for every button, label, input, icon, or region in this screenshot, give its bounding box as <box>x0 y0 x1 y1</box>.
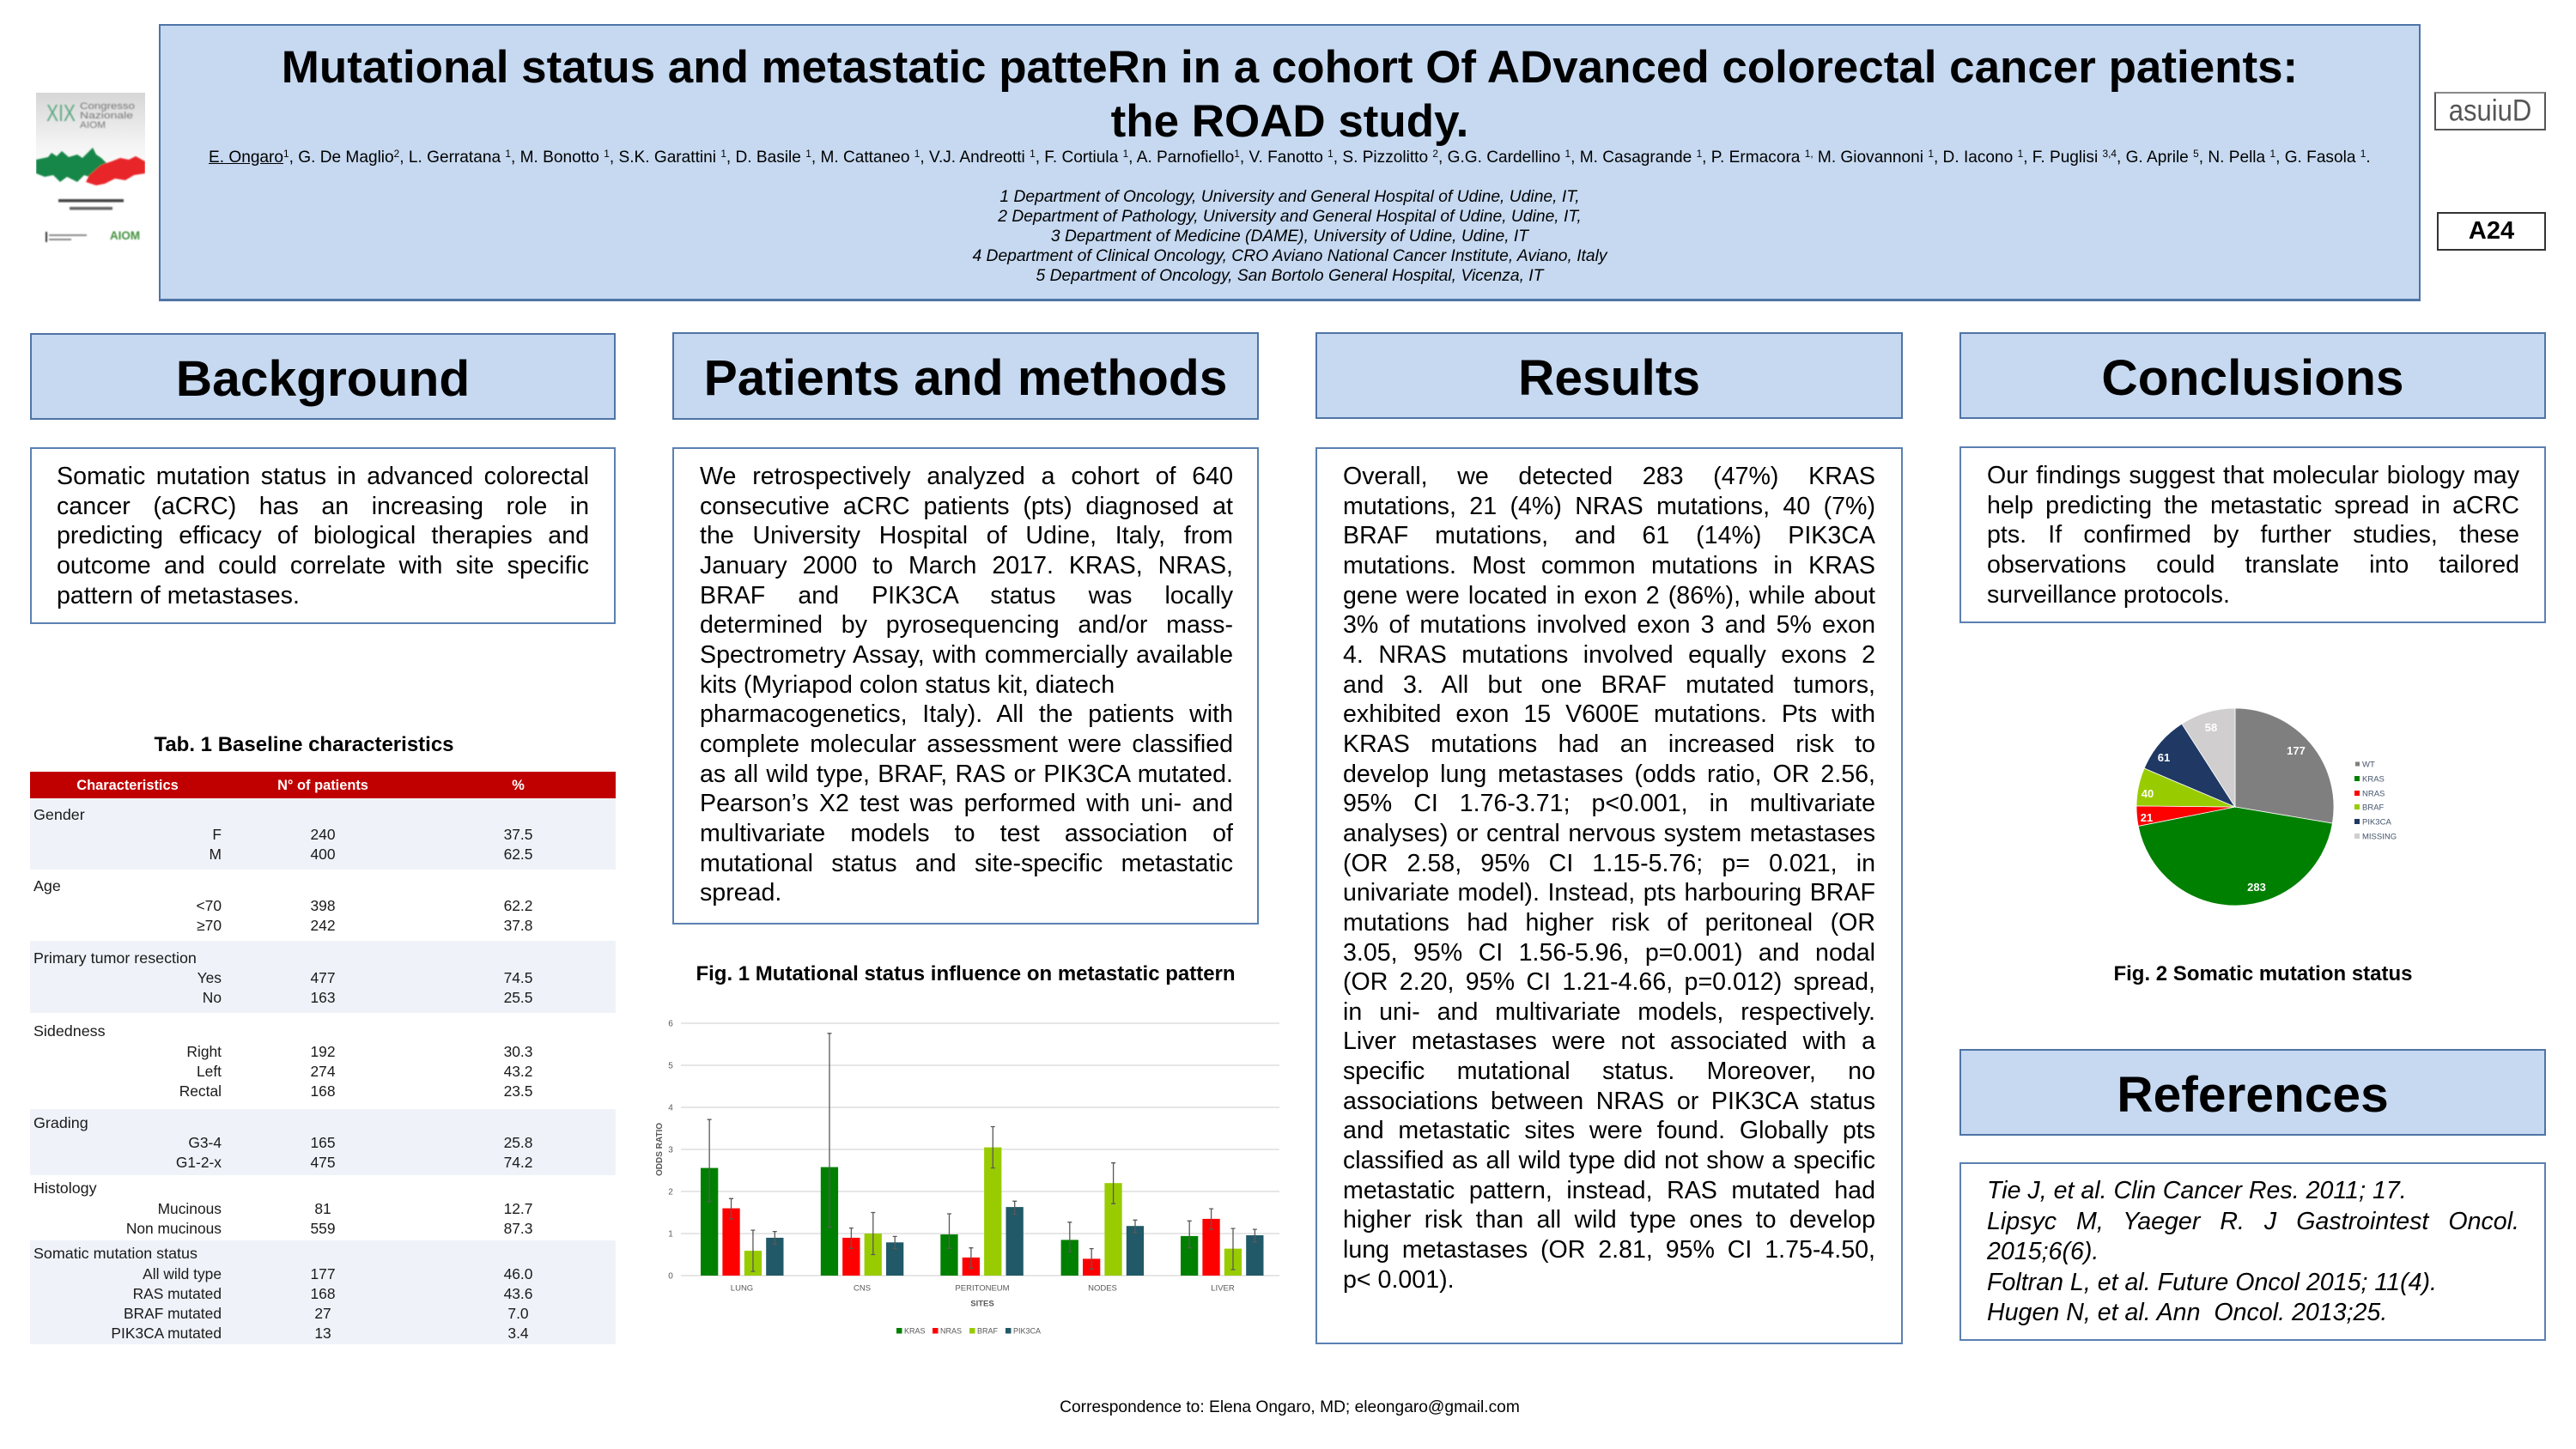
logo: XIX Congresso Nazionale AIOM: XIX <box>46 100 76 126</box>
text: background: outcome and could correlate with site specific <box>57 552 589 579</box>
table rows: sidedness: 43.2 <box>504 1063 532 1080</box>
table rows: gender: 400 <box>310 845 335 862</box>
table rows: age: 398 <box>310 896 335 913</box>
text: results: develop lung metastases (odds ratio, OR 2.56, <box>1343 761 1875 788</box>
y axis title: ODDS RATIO <box>655 1123 665 1176</box>
y axis ticks: 0 <box>668 1272 673 1281</box>
text: results: BRAF mutations, and 61 (14%) PIK3CA <box>1343 522 1875 549</box>
table rows: primary tumor resection: 163 <box>310 989 335 1006</box>
y axis ticks: 3 <box>668 1145 673 1155</box>
slice values: 177 <box>2287 744 2306 757</box>
legend: NRAS <box>2362 790 2385 798</box>
bars: peritoneum <box>940 1126 1024 1276</box>
badge: session type <box>2434 92 2546 130</box>
text: patients and methods <box>700 463 1233 906</box>
text: background: cancer (aCRC) has an increasing role in <box>57 493 589 520</box>
x axis labels: PERITONEUM <box>955 1284 1010 1293</box>
table header: N° of patients <box>277 778 368 793</box>
text: patients and methods: consecutive aCRC patients (pts) diagnosed at <box>700 493 1233 520</box>
text: patients and methods: mutational status and site-specific metastatic <box>700 850 1233 877</box>
table rows: somatic mutation status: 27 <box>314 1305 331 1322</box>
pie chart: somatic mutation status <box>2136 709 2397 906</box>
text: conclusions: help predicting the metastatic spread in aCRC <box>1987 492 2519 519</box>
text: results: univariate model). Instead, pts harbouring BRAF <box>1343 879 1875 906</box>
text: patients and methods: January 2000 to March 2017. KRAS, NRAS, <box>700 552 1233 579</box>
bars: nodes <box>1061 1163 1144 1276</box>
heading: Background <box>30 333 616 420</box>
table rows: somatic mutation status: PIK3CA mutated <box>111 1324 222 1341</box>
logo: XIX Congresso Nazionale AIOM: Nazionale <box>80 111 133 121</box>
table rows: grading: G1-2-x <box>176 1154 222 1171</box>
text: conclusions: Our findings suggest that molecular biology may <box>1987 462 2519 489</box>
table rows: gender: 240 <box>310 826 335 843</box>
table rows: sidedness: 168 <box>310 1082 335 1099</box>
table rows: somatic mutation status: BRAF mutated <box>124 1305 222 1322</box>
legend: PIK3CA <box>1013 1327 1041 1336</box>
legend: NRAS <box>940 1327 962 1336</box>
table rows: histology: Non mucinous <box>126 1219 222 1236</box>
affiliations: 4 Department of Clinical Oncology, CRO Aviano National Cancer Institute, Aviano, Italy <box>972 247 1607 265</box>
panel: background text <box>30 447 616 624</box>
text: results: exhibited exon 15 V600E mutations. Pts with <box>1343 700 1875 728</box>
table rows: age: Age <box>33 877 61 894</box>
badge: session type: asuiuD <box>2449 93 2531 128</box>
legend <box>896 1327 1041 1336</box>
table rows: sidedness: Sidedness <box>33 1022 106 1039</box>
text: results: and metastatic sites were found. Globally pts <box>1343 1117 1875 1144</box>
text: patients and methods: multivariate models to test association of <box>700 820 1233 847</box>
text: results: mutations had higher risk of peritoneal (OR <box>1343 909 1875 937</box>
text: results: specific mutational status. Moreover, no <box>1343 1058 1875 1085</box>
table rows: primary tumor resection: No <box>203 989 222 1006</box>
text: results: 3.05, 95% CI 1.56-5.96, p=0.001) and nodal <box>1343 939 1875 967</box>
slice values <box>2141 721 2306 894</box>
y axis ticks: 5 <box>668 1061 673 1071</box>
heading: Patients and methods: Patients and methods <box>704 350 1227 406</box>
logo: XIX Congresso Nazionale AIOM <box>36 93 145 243</box>
table rows: age <box>33 877 532 934</box>
legend: KRAS <box>904 1327 926 1336</box>
text: patients and methods: spread. <box>700 879 781 906</box>
bars: liver <box>1181 1209 1264 1276</box>
panel: title banner <box>159 24 2421 301</box>
text: patients and methods: pharmacogenetics, Italy). All the patients with <box>700 700 1233 728</box>
text: results: gene were located in exon 2 (86%), while about <box>1343 582 1875 609</box>
text: results: higher risk than all wild type ones to develop <box>1343 1206 1875 1234</box>
table rows: somatic mutation status: 3.4 <box>507 1324 529 1341</box>
table rows: primary tumor resection: 25.5 <box>504 989 532 1006</box>
slice values: 61 <box>2158 751 2170 764</box>
legend: PIK3CA <box>2362 817 2391 828</box>
figure 1 caption: Fig. 1 Mutational status influence on metastatic pattern <box>696 962 1236 985</box>
figure 2 caption: Fig. 2 Somatic mutation status <box>2113 962 2413 985</box>
text: results: metastatic pattern, instead, RAS mutated had <box>1343 1177 1875 1204</box>
text: results: analyses) or central nervous system metastases <box>1343 820 1875 847</box>
legend: MISSING <box>2362 833 2397 841</box>
heading: Conclusions: Conclusions <box>2101 350 2404 406</box>
table rows: age: 242 <box>310 917 335 934</box>
text: references: Hugen N, et al. Ann Oncol. 2013;25. <box>1987 1299 2387 1326</box>
table rows: somatic mutation status: All wild type <box>143 1265 222 1282</box>
table rows: grading: 25.8 <box>504 1133 532 1150</box>
table rows: somatic mutation status: 13 <box>314 1324 331 1341</box>
table header <box>30 772 616 798</box>
table rows: primary tumor resection: Yes <box>197 968 222 985</box>
heading: References <box>1959 1049 2546 1136</box>
table rows: primary tumor resection: Primary tumor resection <box>33 949 197 967</box>
table rows: gender: F <box>212 826 222 843</box>
slice: KRAS <box>2138 807 2332 906</box>
x axis labels: LUNG <box>731 1284 753 1293</box>
affiliations <box>972 188 1607 285</box>
text: patients and methods: determined by pyrosequencing and/or mass- <box>700 611 1233 639</box>
affiliations: 1 Department of Oncology, University and General Hospital of Udine, Udine, IT, <box>999 188 1580 206</box>
panel: patients and methods text <box>672 447 1259 925</box>
table rows: somatic mutation status <box>30 1240 616 1344</box>
text: results: p< 0.001). <box>1343 1266 1455 1294</box>
table rows: sidedness: Rectal <box>179 1082 222 1099</box>
table rows: somatic mutation status: 177 <box>310 1265 335 1282</box>
table rows: sidedness: 23.5 <box>504 1082 532 1099</box>
table rows: sidedness: Right <box>186 1042 222 1059</box>
table rows: grading: 165 <box>310 1133 335 1150</box>
text: conclusions: pts. If confirmed by further studies, these <box>1987 521 2519 549</box>
table rows: histology: 559 <box>310 1219 335 1236</box>
bars: CNS <box>821 1034 903 1276</box>
table rows: sidedness: Left <box>197 1063 222 1080</box>
table rows: grading: G3-4 <box>188 1133 222 1150</box>
heading: Background: Background <box>176 351 470 407</box>
text: results: KRAS mutations had an increased risk to <box>1343 731 1875 758</box>
text: results: (OR 2.20, 95% CI 1.21-4.66, p=0.012) spread, <box>1343 968 1875 996</box>
table header: Characteristics <box>76 778 179 793</box>
x axis labels: CNS <box>854 1284 871 1293</box>
legend: WT <box>2362 761 2375 769</box>
table rows: sidedness: 192 <box>310 1042 335 1059</box>
text: results: associations between NRAS or PIK3CA status <box>1343 1088 1875 1115</box>
text: patients and methods: Spectrometry Assay, with commercially available <box>700 641 1233 669</box>
text: results: 4. NRAS mutations involved equally exons 2 <box>1343 641 1875 669</box>
text: background <box>57 463 589 609</box>
slice values: 283 <box>2247 881 2266 894</box>
table rows: somatic mutation status: 46.0 <box>504 1265 532 1282</box>
table rows: grading: 74.2 <box>504 1154 532 1171</box>
table rows: age: ≥70 <box>197 917 222 934</box>
table rows: somatic mutation status: RAS mutated <box>133 1284 222 1301</box>
heading: Results <box>1315 332 1903 419</box>
logo: XIX Congresso Nazionale AIOM: Congresso <box>80 101 135 112</box>
y axis ticks: 1 <box>668 1229 673 1240</box>
x axis labels: LIVER <box>1211 1284 1235 1293</box>
y axis ticks: 4 <box>668 1104 673 1113</box>
text: conclusions: observations could translate into tailored <box>1987 551 2519 579</box>
table rows: gender: 37.5 <box>504 826 532 843</box>
slice values: 21 <box>2141 811 2153 824</box>
logo: XIX Congresso Nazionale AIOM: AIOM <box>80 120 106 130</box>
panel: references text <box>1959 1162 2546 1341</box>
slice: WT <box>2235 708 2334 823</box>
text: results: mutations, 21 (4%) NRAS mutations, 40 (7%) <box>1343 493 1875 520</box>
table caption: Tab. 1 Baseline characteristics <box>154 733 454 756</box>
affiliations: 5 Department of Oncology, San Bortolo General Hospital, Vicenza, IT <box>1036 267 1543 285</box>
heading: Conclusions <box>1959 332 2546 419</box>
text: patients and methods: the University Hospital of Udine, Italy, from <box>700 522 1233 549</box>
table rows: sidedness: 274 <box>310 1063 335 1080</box>
text: results <box>1343 463 1875 1294</box>
text: results: Liver metastases were not associated with a <box>1343 1028 1875 1055</box>
table rows: sidedness <box>33 1022 532 1099</box>
bars: lung <box>701 1119 783 1276</box>
panel: results text <box>1315 447 1903 1344</box>
panel: conclusions text <box>1959 446 2546 623</box>
text: results: 3% of mutations involved exon 3 and 5% exon <box>1343 611 1875 639</box>
table rows: somatic mutation status: 7.0 <box>507 1305 529 1322</box>
text: results: and 3. All but one BRAF mutated tumors, <box>1343 671 1875 699</box>
text: results: (OR 2.58, 95% CI 1.15-5.76; p= 0.021, in <box>1343 850 1875 877</box>
table rows: gender <box>30 798 616 870</box>
text: results: 95% CI 1.76-3.71; p<0.001, in multivariate <box>1343 790 1875 817</box>
heading: Patients and methods <box>672 332 1259 420</box>
text: background: Somatic mutation status in advanced colorectal <box>57 463 589 490</box>
slice: NRAS <box>2136 806 2235 826</box>
table rows: grading: Grading <box>33 1114 88 1131</box>
y axis ticks: 2 <box>668 1188 673 1197</box>
legend: KRAS <box>2362 774 2385 785</box>
text: references: Foltran L, et al. Future Oncol 2015; 11(4). <box>1987 1269 2437 1296</box>
text: references <box>1987 1177 2519 1326</box>
title: the ROAD study. <box>1111 96 1468 147</box>
table rows: histology: 87.3 <box>504 1219 532 1236</box>
y axis ticks: 6 <box>668 1020 673 1028</box>
y axis ticks <box>668 1020 673 1281</box>
table rows: histology: Mucinous <box>158 1200 222 1217</box>
table rows: gender: Gender <box>33 805 85 822</box>
legend: BRAF <box>977 1327 999 1336</box>
heading: Results: Results <box>1518 350 1700 406</box>
table rows: primary tumor resection <box>30 941 616 1013</box>
table rows: gender: M <box>210 845 222 862</box>
table rows: grading: 475 <box>310 1154 335 1171</box>
slice values: 58 <box>2205 721 2217 734</box>
table rows: age: 37.8 <box>504 917 532 934</box>
table rows: somatic mutation status: 43.6 <box>504 1284 532 1301</box>
text: background: pattern of metastases. <box>57 582 300 609</box>
legend: BRAF <box>2362 803 2385 812</box>
text: patients and methods: Pearson’s X2 test was performed with uni- and <box>700 790 1233 817</box>
badge: poster number: A24 <box>2469 217 2514 245</box>
title <box>282 42 2298 147</box>
text: results: Overall, we detected 283 (47%) KRAS <box>1343 463 1875 490</box>
text: results: mutations. Most common mutations in KRAS <box>1343 552 1875 579</box>
text: patients and methods: complete molecular assessment were classified <box>700 731 1233 758</box>
heading: References: References <box>2117 1067 2389 1123</box>
slice: missing <box>2182 708 2235 807</box>
text: references: Tie J, et al. Clin Cancer Res. 2011; 17. <box>1987 1177 2407 1204</box>
text: conclusions <box>1987 462 2519 609</box>
authors: E. Ongaro1, G. De Maglio2, L. Gerratana 1, M. Bonotto 1, S.K. Garattini 1, D. Basile 1, M. Cattaneo 1, V.J. Andreotti 1, F. Cortiula 1, A. Parnofiello1, V. Fanotto 1, S. Pizzolitto 2, G.G. Cardellino 1, M. Casagrande 1, P. Ermacora 1, M. Giovannoni 1, D. Iacono 1, F. Puglisi 3,4, G. Aprile 5, N. Pella 1, G. Fasola 1. <box>209 148 2371 167</box>
slice: BRAF <box>2136 768 2235 807</box>
slice values: 40 <box>2142 787 2154 800</box>
text: background: predicting efficacy of biological therapies and <box>57 522 589 549</box>
table rows: histology <box>33 1179 532 1236</box>
correspondence footer: Correspondence to: Elena Ongaro, MD; eleongaro@gmail.com <box>1060 1398 1520 1416</box>
table rows: gender: 62.5 <box>504 845 532 862</box>
text: patients and methods: We retrospectively analyzed a cohort of 640 <box>700 463 1233 490</box>
affiliations: 2 Department of Pathology, University and General Hospital of Udine, Udine, IT, <box>998 208 1582 226</box>
table rows: somatic mutation status: 168 <box>310 1284 335 1301</box>
text: references: Lipsyc M, Yaeger R. J Gastrointest Oncol. <box>1987 1207 2519 1234</box>
table rows: age: 62.2 <box>504 896 532 913</box>
table rows: primary tumor resection: 477 <box>310 968 335 985</box>
table rows: sidedness: 30.3 <box>504 1042 532 1059</box>
table: baseline characteristics <box>30 772 616 1344</box>
affiliations: 3 Department of Medicine (DAME), University of Udine, Udine, IT <box>1051 227 1528 246</box>
title: Mutational status and metastatic patteRn in a cohort Of ADvanced colorectal cancer patients: <box>282 42 2298 93</box>
table rows: somatic mutation status: Somatic mutation status <box>33 1245 197 1262</box>
x axis labels: NODES <box>1088 1284 1117 1293</box>
table rows: age: <70 <box>196 896 222 913</box>
legend <box>2354 761 2397 841</box>
logo: XIX Congresso Nazionale AIOM: AIOM <box>110 228 140 242</box>
table rows: histology: 12.7 <box>504 1200 532 1217</box>
x axis title: SITES <box>970 1300 994 1308</box>
slice: PIK3CA <box>2144 724 2235 807</box>
text: patients and methods: kits (Myriapod colon status kit, diatech <box>700 671 1115 699</box>
table rows: primary tumor resection: 74.5 <box>504 968 532 985</box>
table rows: histology: 81 <box>314 1200 331 1217</box>
x axis labels <box>731 1284 1235 1293</box>
table rows: grading <box>30 1109 616 1175</box>
table header: % <box>512 778 525 793</box>
text: conclusions: surveillance protocols. <box>1987 581 2230 609</box>
text: results: classified as all wild type did not show a specific <box>1343 1147 1875 1174</box>
text: results: lung metastases (OR 2.81, 95% CI 1.75-4.50, <box>1343 1236 1875 1264</box>
text: references: 2015;6(6). <box>1987 1238 2099 1265</box>
text: patients and methods: BRAF and PIK3CA status was locally <box>700 582 1233 609</box>
badge: poster number <box>2437 212 2546 251</box>
bar chart: odds ratio by metastatic site <box>655 1020 1279 1336</box>
table rows: histology: Histology <box>33 1179 97 1197</box>
text: results: in uni- and multivariate models, respectively. <box>1343 998 1875 1026</box>
text: patients and methods: as all wild type, BRAF, RAS or PIK3CA mutated. <box>700 761 1233 788</box>
